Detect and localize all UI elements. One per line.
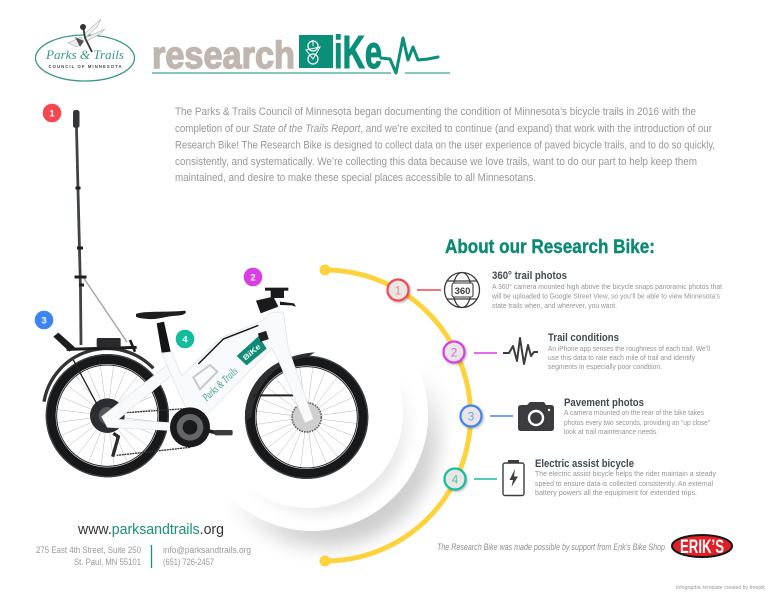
pin 3: 3 bbox=[41, 316, 47, 326]
logo script text: Parks & Trails bbox=[45, 47, 124, 62]
marker 1: 1 bbox=[395, 284, 402, 298]
illustration: research e-bike bbox=[44, 110, 368, 478]
description 1: state trails when, and wherever, you want. bbox=[492, 301, 617, 310]
description 1: will be uploaded to Google Street View, so you’ll be able to view Minnesota’s bbox=[491, 292, 720, 300]
sticker bbox=[258, 331, 269, 342]
logo: Erik's: ERIK’S bbox=[680, 537, 724, 558]
address: St. Paul, MN 55101 bbox=[74, 557, 141, 567]
marker 1 bbox=[388, 280, 408, 300]
icon: vibration waveform bbox=[503, 338, 538, 364]
chainring bbox=[170, 407, 210, 447]
word: research: research bbox=[152, 35, 295, 77]
description 3: A camera mounted on the rear of the bike takes bbox=[564, 408, 704, 417]
pin 2 bbox=[244, 268, 262, 286]
description 1: A 360° camera mounted high above the bicycle snaps panoramic photos that bbox=[492, 282, 722, 291]
intro paragraph: completion of our State of the Trails Report, and we’re excited to continue (and expand) that work with the introduction of our bbox=[175, 123, 712, 135]
logo: Erik's bbox=[672, 535, 732, 558]
rear wheel bbox=[44, 349, 168, 477]
marker 4 bbox=[444, 468, 466, 490]
connector 1 bbox=[417, 289, 441, 291]
sponsor credit: The Research Bike was made possible by support from Erik’s Bike Shop bbox=[437, 542, 665, 552]
contact details bbox=[163, 545, 251, 567]
handlebars bbox=[256, 288, 296, 313]
intro paragraph bbox=[175, 106, 715, 184]
description 4: speed to ensure data is collected consistently. An external bbox=[535, 479, 713, 488]
footer divider bbox=[150, 545, 152, 568]
contact details: (651) 726-2457 bbox=[163, 557, 214, 567]
contact details: info@parksandtrails.org bbox=[163, 545, 251, 555]
title 2: Trail conditions bbox=[548, 332, 619, 344]
marker 4: 4 bbox=[452, 472, 459, 486]
icon: dragonfly bbox=[68, 19, 105, 52]
feature 1: 360 trail photos bbox=[388, 270, 722, 310]
logo small text: COUNCIL OF MINNESOTA bbox=[48, 64, 122, 69]
underline bbox=[152, 72, 450, 74]
icon: 360 globe: 360 bbox=[455, 286, 470, 297]
white frame bbox=[102, 312, 313, 431]
icon: 360 globe bbox=[444, 272, 480, 308]
frame script lettering: Parks & Trails bbox=[200, 365, 241, 404]
logo: Parks & Trails Council of Minnesota bbox=[36, 19, 134, 81]
yellow arc timeline bbox=[320, 264, 470, 566]
title: researchBike wordmark bbox=[152, 26, 450, 78]
frame sign: BiKe bbox=[241, 342, 262, 362]
pin 3 bbox=[35, 311, 53, 329]
front wheel bbox=[245, 352, 368, 478]
feature 2: trail conditions bbox=[444, 332, 710, 371]
intro paragraph: consistently, and systematically. We’re collecting this data because we love trails, want to do our part to help keep them bbox=[175, 156, 697, 168]
description 2 bbox=[548, 344, 710, 371]
address: 275 East 4th Street, Suite 250 bbox=[36, 545, 141, 555]
connector 2 bbox=[474, 352, 497, 354]
description 2: An iPhone app senses the roughness of each trail. We’ll bbox=[548, 344, 710, 353]
marker 3: 3 bbox=[468, 410, 475, 424]
connector 3 bbox=[490, 415, 513, 417]
description 2: use this data to rate each mile of trail and identify bbox=[548, 353, 695, 362]
top tube accent bbox=[198, 325, 258, 364]
word: iKe: iKe bbox=[334, 26, 382, 78]
frame sign bbox=[237, 336, 267, 365]
feature 3: pavement photos bbox=[460, 397, 710, 436]
feature 4: electric assist bicycle bbox=[444, 458, 716, 497]
description 2: segments in especially poor condition. bbox=[548, 362, 662, 371]
intro paragraph: maintained, and desire to make these special places accessible to all Minnesotans. bbox=[175, 172, 536, 184]
camera pole bbox=[73, 110, 127, 345]
pin 2: 2 bbox=[250, 272, 256, 284]
drivetrain bbox=[113, 408, 233, 457]
background discs with soft shadows bbox=[196, 299, 440, 547]
marker 2 bbox=[444, 342, 464, 362]
battery mount bbox=[193, 365, 217, 389]
rear rack and camera bbox=[53, 333, 137, 410]
intro paragraph: The Parks & Trails Council of Minnesota began documenting the condition of Minnesota’s bicycle trails in 2016 with the bbox=[175, 106, 696, 118]
connector 4 bbox=[474, 478, 497, 480]
pin 1: 1 bbox=[49, 108, 55, 120]
description 4: battery powers all the equipment for extended trips. bbox=[535, 488, 697, 497]
template credit: Infographic template created by freepik bbox=[676, 585, 765, 591]
icon: battery bbox=[503, 460, 524, 496]
heading: About our Research Bike: About our Research Bike: bbox=[445, 237, 655, 258]
description 3: photos every two seconds, providing an “up close” bbox=[564, 418, 710, 427]
description 3 bbox=[564, 408, 710, 436]
website url: www.parksandtrails.org bbox=[77, 521, 224, 538]
description 4: The electric assist bicycle helps the rider maintain a steady bbox=[535, 469, 716, 478]
icon: camera bbox=[518, 402, 554, 431]
description 3: look at trail maintenance needs. bbox=[564, 427, 658, 436]
marker 3 bbox=[460, 406, 482, 426]
pulse line bbox=[381, 38, 438, 73]
title 3: Pavement photos bbox=[564, 397, 644, 409]
seat and post bbox=[136, 311, 186, 353]
description 1 bbox=[491, 282, 722, 310]
letter B block with bicycle icon: B bbox=[300, 28, 332, 75]
pin 1 bbox=[43, 104, 61, 122]
pin 4: 4 bbox=[182, 334, 188, 346]
title 1: 360° trail photos bbox=[492, 270, 567, 282]
marker 2: 2 bbox=[451, 346, 458, 360]
title 4: Electric assist bicycle bbox=[535, 458, 634, 470]
description 4 bbox=[535, 469, 716, 497]
pin 4 bbox=[176, 330, 194, 348]
address bbox=[36, 545, 141, 567]
